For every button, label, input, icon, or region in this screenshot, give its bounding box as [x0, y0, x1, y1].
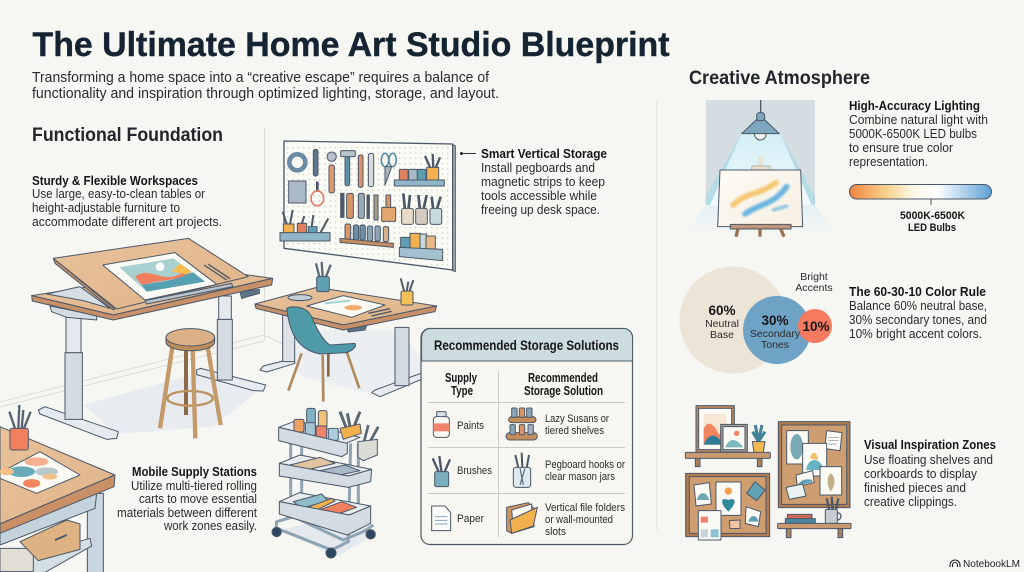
side cup — [358, 425, 378, 461]
text block: Sturdy and Flexible Workspaces: height-adjustable furniture to — [32, 201, 180, 215]
subtitle — [32, 69, 499, 102]
text block: Smart Vertical Storage: tools accessible while — [481, 189, 597, 203]
illustration: pegboard with tools — [280, 141, 455, 272]
chart: 60-30-10 circles: Base — [710, 329, 734, 341]
text block: Smart Vertical Storage: freeing up desk space. — [481, 203, 600, 217]
text block: Mobile Supply Stations: work zones easily. — [163, 519, 257, 533]
text block: Sturdy and Flexible Workspaces — [32, 174, 222, 229]
text block: The 60-30-10 Color Rule: 10% bright accent colors. — [849, 327, 982, 341]
illustration: second desk with teal chair — [255, 262, 437, 402]
table column headers: Storage Solution — [524, 384, 603, 398]
bottle shelf — [340, 224, 393, 247]
table row: brushes: Brushes — [457, 465, 492, 477]
text block: Visual Inspiration Zones: Visual Inspiration Zones — [864, 438, 996, 452]
teal cup with brushes — [316, 262, 331, 292]
table column headers — [445, 371, 603, 398]
callout arrow — [460, 152, 476, 155]
text block: Smart Vertical Storage: magnetic strips to keep — [481, 175, 605, 189]
table row: paper: Paper — [457, 513, 484, 525]
subtitle: functionality and inspiration through optimized lighting, storage, and layout. — [32, 85, 499, 102]
table row: paper: slots — [545, 526, 566, 538]
right corkboard — [778, 422, 850, 508]
text block: Smart Vertical Storage: Smart Vertical Storage — [481, 147, 607, 161]
text block: High-Accuracy Lighting: representation. — [849, 155, 928, 169]
table row: paints — [433, 408, 609, 440]
table row: paints: Lazy Susans or — [545, 413, 609, 425]
file bin — [399, 233, 443, 261]
table row: brushes: Pegboard hooks or — [545, 459, 625, 471]
text block: Visual Inspiration Zones: finished pieces and — [864, 481, 966, 495]
text block: High-Accuracy Lighting: High-Accuracy Lighting — [849, 99, 980, 113]
paint palette — [0, 452, 80, 493]
table row: paper: Vertical file folders — [545, 502, 625, 514]
top right shelf — [394, 154, 444, 186]
heading: Functional Foundation: Functional Foundation — [32, 125, 223, 146]
color temperature bar: LED Bulbs — [908, 222, 956, 234]
text block: High-Accuracy Lighting: 5000K-6500K LED bulbs — [849, 127, 977, 141]
table row: paper: or wall-mounted — [545, 514, 613, 526]
text block: Smart Vertical Storage: Install pegboards and — [481, 161, 595, 175]
chart: 60-30-10 circles: Bright — [800, 271, 828, 283]
chair — [287, 307, 359, 402]
text block: The 60-30-10 Color Rule: 30% secondary tones, and — [849, 313, 987, 327]
bottom tier — [279, 493, 371, 535]
table row: paints: Paints — [457, 420, 484, 432]
chart: 60-30-10 circles: Secondary — [750, 328, 801, 340]
chart: 60-30-10 circles: Tones — [761, 339, 789, 351]
illustration: shelves and corkboards — [685, 406, 851, 540]
text block: High-Accuracy Lighting: to ensure true color — [849, 141, 953, 155]
text block: Smart Vertical Storage — [481, 147, 607, 217]
chart: 60-30-10 circles — [680, 266, 833, 374]
chart: 60-30-10 circles: Neutral — [705, 318, 739, 330]
chart: 60-30-10 circles: 10% — [802, 319, 830, 334]
top tier — [279, 408, 361, 457]
text block: Mobile Supply Stations: carts to move essential — [139, 492, 257, 506]
illustration: foreground table with palette — [0, 405, 115, 572]
table heading: Recommended Storage Solutions — [434, 337, 619, 353]
left corkboard — [686, 473, 770, 540]
table row: paints: tiered shelves — [545, 425, 604, 437]
text block: Visual Inspiration Zones: corkboards to display — [864, 467, 978, 481]
illustration: lamp over easel — [685, 100, 837, 237]
bottom left shelf — [280, 210, 330, 241]
text block: Mobile Supply Stations: materials between different — [117, 506, 257, 520]
text block: High-Accuracy Lighting: Combine natural light with — [849, 113, 988, 127]
text block: Mobile Supply Stations: Mobile Supply Stations — [132, 465, 257, 479]
table column headers: Supply — [445, 371, 477, 385]
text block: The 60-30-10 Color Rule — [849, 285, 987, 341]
stool — [160, 329, 221, 438]
color temperature bar — [850, 184, 992, 234]
text block: Sturdy and Flexible Workspaces: accommodate different art projects. — [32, 215, 222, 229]
yellow cup — [401, 278, 413, 305]
NotebookLM logo: NotebookLM — [963, 558, 1020, 570]
middle tier — [279, 455, 372, 487]
title: The Ultimate Home Art Studio Blueprint — [32, 26, 670, 64]
color temperature bar: 5000K-6500K — [900, 210, 965, 222]
chart: 60-30-10 circles: Accents — [795, 282, 833, 294]
shelf with framed art — [685, 406, 770, 467]
illustration: rolling supply cart — [272, 408, 378, 558]
orange pencil cup — [9, 405, 31, 450]
text block: Mobile Supply Stations: Utilize multi-tiered rolling — [131, 479, 257, 493]
heading: Creative Atmosphere: Creative Atmosphere — [689, 68, 870, 89]
text block: Visual Inspiration Zones: Use floating shelves and — [864, 453, 993, 467]
text block: The 60-30-10 Color Rule: Balance 60% neutral base, — [849, 299, 987, 313]
table row: brushes — [433, 453, 625, 487]
table row: brushes: clear mason jars — [545, 471, 615, 483]
illustration: drafting table with stool — [32, 238, 273, 439]
text block: Sturdy and Flexible Workspaces: Use large, easy-to-clean tables or — [32, 187, 205, 201]
table column headers: Recommended — [528, 371, 598, 385]
text block: The 60-30-10 Color Rule: The 60-30-10 Color Rule — [849, 285, 986, 299]
cart wheels — [272, 527, 375, 558]
text block: High-Accuracy Lighting — [849, 99, 988, 169]
table column headers: Type — [451, 384, 473, 398]
mason jars — [402, 193, 442, 224]
text block: Sturdy and Flexible Workspaces: Sturdy & Flexible Workspaces — [32, 174, 198, 188]
shelf with books and mug — [778, 497, 851, 538]
text block: Mobile Supply Stations — [117, 465, 257, 533]
chart: 60-30-10 circles: 60% — [708, 303, 736, 318]
table row: paper — [432, 502, 625, 538]
subtitle: Transforming a home space into a “creative escape” requires a balance of — [32, 69, 490, 86]
text block: Visual Inspiration Zones: creative clippings. — [864, 495, 957, 509]
text block: Visual Inspiration Zones — [864, 438, 996, 509]
storage table panel — [421, 328, 632, 544]
chart: 60-30-10 circles: 30% — [761, 313, 789, 328]
